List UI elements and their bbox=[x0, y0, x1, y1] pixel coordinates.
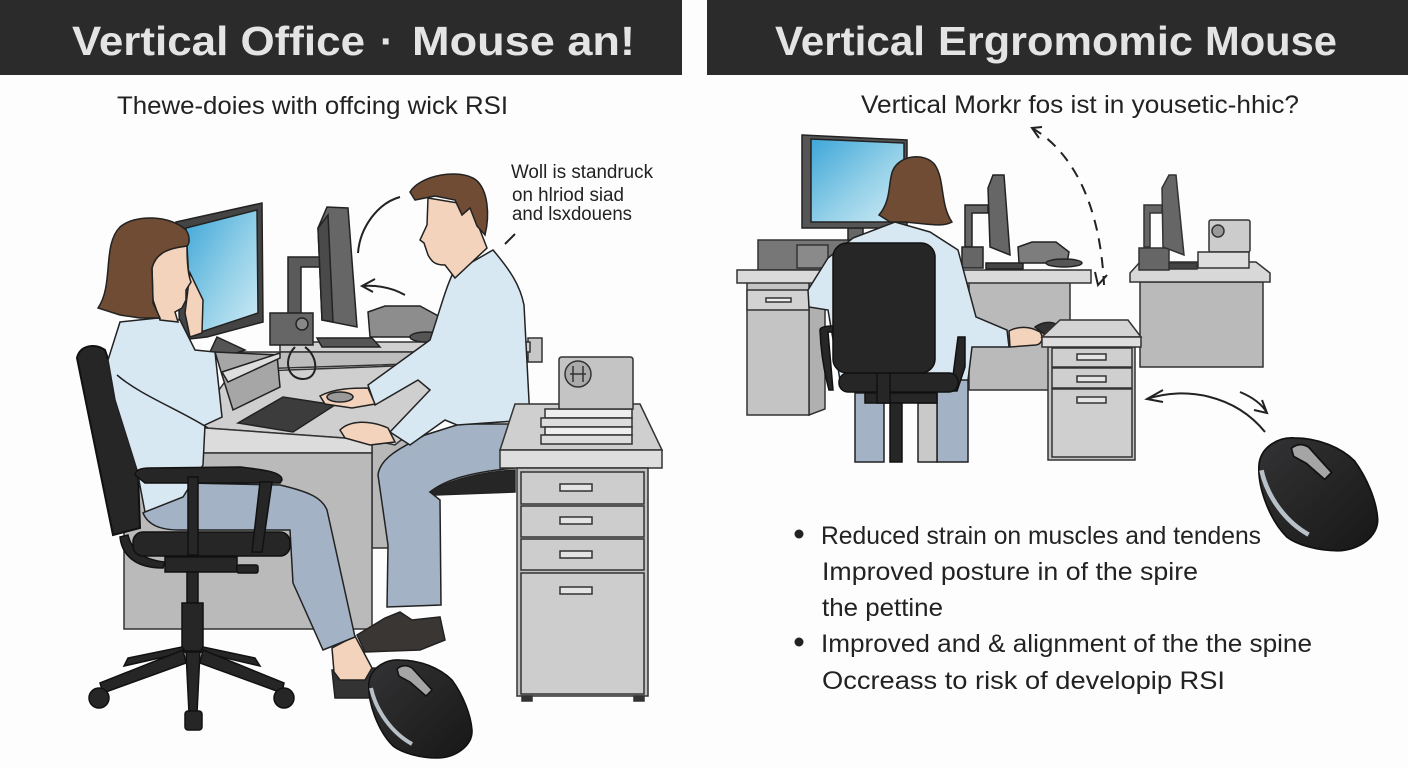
man bbox=[320, 174, 530, 652]
left drawer cabinet bbox=[500, 404, 662, 701]
woman's chair back bbox=[77, 346, 140, 535]
bullet list bbox=[794, 522, 1312, 695]
books and laptop bbox=[541, 357, 633, 444]
bullet list: Improved posture in of the spire bbox=[822, 558, 1198, 586]
right subtitle: Vertical Morkr fos ist in yousetic-hhic? bbox=[861, 91, 1299, 119]
bullet list: Reduced strain on muscles and tendens bbox=[821, 522, 1261, 550]
left subtitle: Thewe-doies with offcing wick RSI bbox=[117, 92, 508, 120]
left scene: monitors and equipment bbox=[176, 203, 442, 432]
right header bar: Vertical bbox=[775, 18, 925, 64]
bullet list: the pettine bbox=[822, 594, 943, 622]
left header bar: Mouse an! bbox=[412, 18, 635, 64]
woman's chair seat and base bbox=[89, 467, 294, 730]
woman bbox=[98, 218, 375, 698]
left callout text bbox=[511, 162, 653, 225]
left scene: desks bbox=[124, 338, 542, 629]
right far desk bbox=[1130, 175, 1270, 367]
curved double arrow bbox=[1147, 390, 1267, 432]
right header bar: Mouse bbox=[1205, 18, 1337, 64]
right scene: dashed arc arrow bbox=[1032, 127, 1107, 285]
right monitor and equipment bbox=[802, 135, 1082, 269]
left mouse bbox=[369, 660, 472, 758]
left callout text: on hlriod siad bbox=[512, 185, 624, 206]
right main desk bbox=[737, 240, 1091, 415]
bullet list: Occreass to risk of developip RSI bbox=[822, 667, 1225, 695]
left header bar: Vertical Office bbox=[72, 18, 365, 64]
left arrows bbox=[358, 197, 515, 295]
right seated worker and chair bbox=[808, 157, 1058, 462]
left callout text: and lsxdouens bbox=[512, 204, 632, 225]
left header bar: · bbox=[380, 18, 394, 64]
left callout text: Woll is standruck bbox=[511, 162, 653, 183]
right mouse bbox=[1259, 438, 1378, 551]
right drawer pedestal bbox=[1042, 320, 1141, 460]
bullet list: Improved and & alignment of the the spine bbox=[821, 630, 1312, 658]
left header bar bbox=[0, 0, 682, 75]
right header bar bbox=[707, 0, 1408, 75]
right header bar: Ergromomic bbox=[938, 18, 1193, 64]
